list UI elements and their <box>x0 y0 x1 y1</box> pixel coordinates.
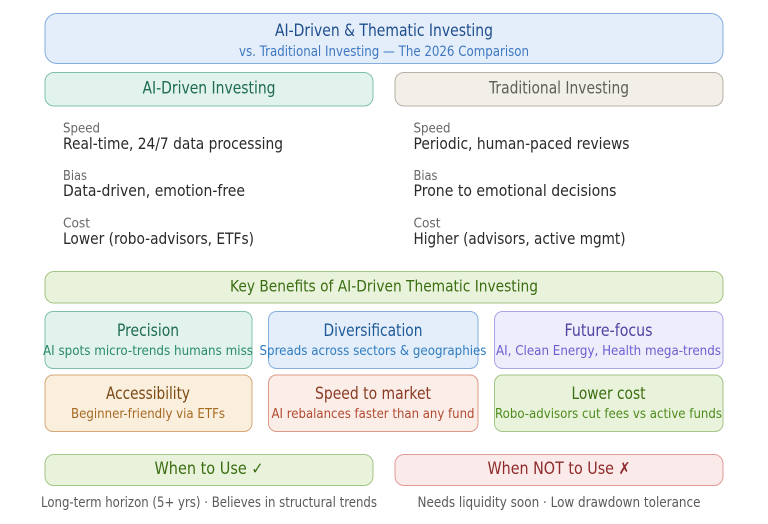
column: AI-driven attributes: Real-time, 24/7 data processing <box>63 134 283 153</box>
column: traditional attributes: Speed <box>414 120 450 136</box>
column: AI-driven attributes: Data-driven, emotion-free <box>63 181 245 200</box>
card: future-focus: Future-focus <box>564 321 652 340</box>
panel: traditional header: Traditional Investing <box>488 78 629 98</box>
card: future-focus <box>494 312 723 368</box>
card: precision: Precision <box>117 321 179 340</box>
column: traditional attributes: Periodic, human-paced reviews <box>414 134 630 153</box>
card: speed to market <box>268 375 478 432</box>
card: lower cost <box>494 375 723 432</box>
column: AI-driven attributes: Cost <box>63 216 90 232</box>
card: diversification: Spreads across sectors & geographies <box>260 343 486 359</box>
card: precision <box>43 312 253 368</box>
column: traditional attributes: Bias <box>414 168 438 184</box>
card: accessibility: Accessibility <box>106 384 190 403</box>
when not to use detail: Needs liquidity soon · Low drawdown tolerance <box>418 495 700 511</box>
card: accessibility: Beginner-friendly via ETFs <box>71 406 225 422</box>
key benefits heading <box>45 272 723 303</box>
when not to use label <box>395 454 723 486</box>
panel: AI-driven header <box>45 72 373 106</box>
column: AI-driven attributes: Bias <box>63 168 87 184</box>
column: traditional attributes: Higher (advisors, active mgmt) <box>414 229 626 248</box>
when to use label: When to Use ✓ <box>154 459 264 478</box>
card: lower cost: Robo-advisors cut fees vs active funds <box>495 406 722 422</box>
card: future-focus: AI, Clean Energy, Health mega-trends <box>496 343 721 359</box>
panel: AI-driven header: AI-Driven Investing <box>142 78 276 98</box>
column: traditional attributes: Cost <box>414 216 440 232</box>
column: traditional attributes: Prone to emotional decisions <box>414 181 616 200</box>
card: lower cost: Lower cost <box>572 384 646 403</box>
card: accessibility <box>45 375 252 432</box>
column: traditional attributes <box>414 120 630 248</box>
column: AI-driven attributes <box>63 120 283 248</box>
when to use label <box>45 454 373 486</box>
when to use detail: Long-term horizon (5+ yrs) · Believes in structural trends <box>41 495 377 511</box>
card: precision: AI spots micro-trends humans miss <box>43 343 253 359</box>
subtitle: vs. Traditional Investing — The 2026 Comparison <box>239 44 529 60</box>
key benefits heading: Key Benefits of AI-Driven Thematic Investing <box>230 276 538 296</box>
card: diversification: Diversification <box>324 321 422 340</box>
column: AI-driven attributes: Lower (robo-advisors, ETFs) <box>63 229 254 248</box>
title: AI-Driven & Thematic Investing <box>275 21 493 41</box>
card: speed to market: Speed to market <box>315 384 431 403</box>
title banner <box>45 14 723 64</box>
panel: traditional header <box>395 72 723 106</box>
card: diversification <box>260 312 486 368</box>
when not to use label: When NOT to Use ✗ <box>488 459 630 478</box>
column: AI-driven attributes: Speed <box>63 120 100 136</box>
card: speed to market: AI rebalances faster than any fund <box>272 406 474 422</box>
